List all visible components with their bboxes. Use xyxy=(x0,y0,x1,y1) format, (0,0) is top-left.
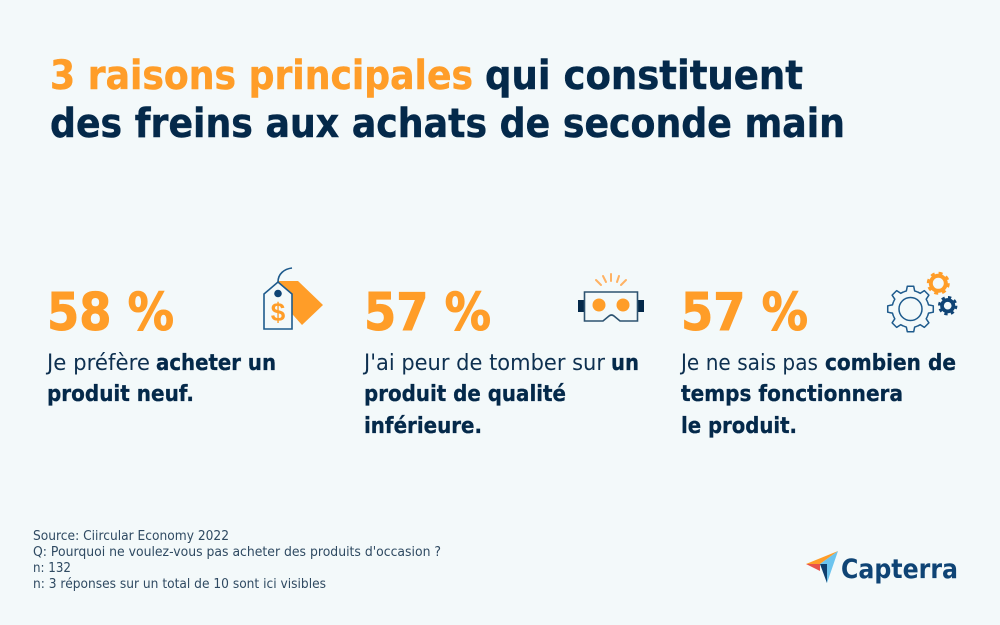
title xyxy=(50,53,845,147)
source notes: Source: Ciircular Economy 2022 xyxy=(33,529,229,544)
description 2: J'ai peur de tomber sur xyxy=(362,351,606,376)
source notes: n: 3 réponses sur un total de 10 sont ici visibles xyxy=(33,577,326,592)
stat: 57 %: 57 % xyxy=(364,283,491,343)
description 3 xyxy=(679,351,956,439)
icon: price tag: $ xyxy=(271,297,286,327)
title: qui constituent xyxy=(485,53,803,99)
description 1: produit neuf. xyxy=(47,382,194,407)
description 2: inférieure. xyxy=(364,414,482,439)
description 1: Je préfère xyxy=(45,351,150,376)
source notes xyxy=(33,529,441,592)
source notes: Q: Pourquoi ne voulez-vous pas acheter des produits d'occasion ? xyxy=(33,545,441,560)
icon: gears xyxy=(888,273,956,332)
panel: reason 2 xyxy=(362,274,644,439)
description 3: combien de xyxy=(825,351,956,376)
stat: 57 %: 57 % xyxy=(681,283,808,343)
description 3: Je ne sais pas xyxy=(679,351,818,376)
panel: reason 3 xyxy=(679,273,956,439)
icon: VR headset xyxy=(578,274,644,321)
description 1: acheter un xyxy=(156,351,276,376)
source notes: n: 132 xyxy=(33,561,71,576)
description 1 xyxy=(45,351,276,407)
description 2: un xyxy=(611,351,639,376)
title: des freins aux achats de seconde main xyxy=(50,101,845,147)
icon: Capterra arrow xyxy=(806,551,838,583)
wordmark: Capterra xyxy=(841,554,958,585)
title: 3 raisons principales xyxy=(50,53,473,99)
description 3: temps fonctionnera xyxy=(681,382,903,407)
icon: price tag xyxy=(264,268,323,329)
description 3: le produit. xyxy=(681,414,797,439)
description 2: produit de qualité xyxy=(364,382,566,407)
description 2 xyxy=(362,351,639,439)
panel: reason 1 xyxy=(45,268,323,407)
stat: 58 %: 58 % xyxy=(47,283,174,343)
logo: Capterra xyxy=(806,551,958,585)
